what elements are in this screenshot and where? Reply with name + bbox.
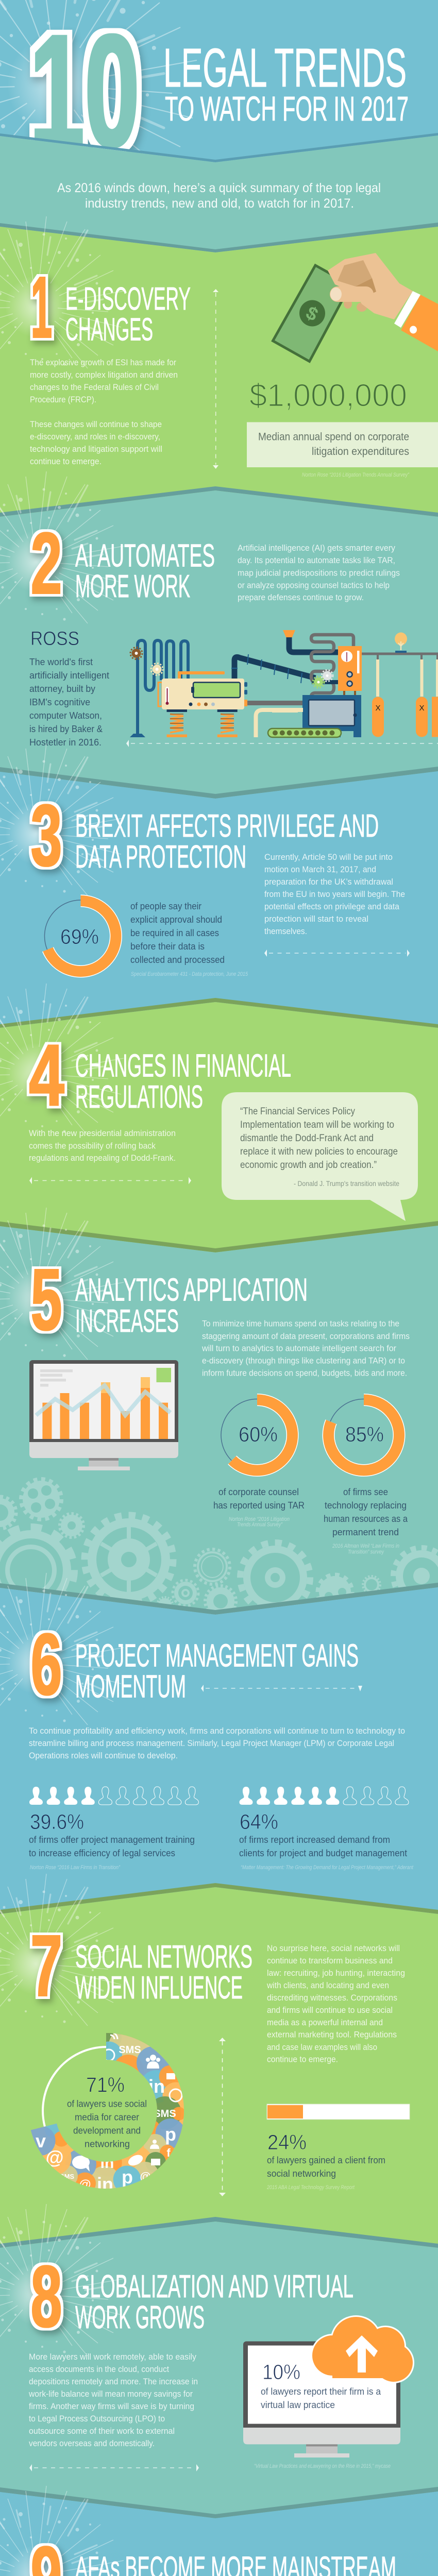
arrow: horizontal dashed (201, 1685, 362, 1692)
heading (75, 1939, 252, 2006)
donut caption (130, 901, 225, 965)
body text: inform future decisions on spend, budgets, bids and more. (202, 1368, 407, 1378)
heading: MOMENTUM (75, 1669, 186, 1705)
icon: hand holding dollar bill (273, 253, 438, 362)
body text: depositions remotely and more. The increase in (29, 2377, 198, 2386)
body text: regulations and repealing of Dodd-Frank. (29, 1153, 176, 1163)
donut caption: of people say their (130, 901, 201, 911)
source: Norton Rose “2016 Litigation Trends Annual Survey” (302, 472, 410, 478)
illustration: AI machine (130, 630, 438, 737)
body text: potential effects on privilege and data (264, 902, 399, 911)
donut caption: before their data is (130, 941, 205, 952)
progress bar: 24% (267, 2104, 410, 2120)
donut chart: social icons 71%: of lawyers use social (67, 2098, 147, 2109)
large number 10: 10 (29, 1, 140, 180)
body text: vendors overseas and domestically. (29, 2438, 155, 2448)
body text: and case law examples will also (267, 2042, 377, 2052)
donut chart: social icons 71%: @ (79, 2178, 91, 2192)
donut chart: social icons 71%: SMS (119, 2044, 141, 2056)
illustration: monitor with stat: of lawyers report their firm is a (261, 2386, 381, 2397)
body text: external marketing tool. Regulations (267, 2030, 397, 2039)
caption: corporate counsel (213, 1486, 305, 1528)
callout box: median annual spend (247, 422, 438, 467)
body text: day. Its potential to automate tasks like TAR, (238, 555, 395, 565)
body text (30, 358, 178, 466)
body text: law: recruiting, job hunting, interacting (267, 1968, 405, 1978)
illustration: monitor with stat: virtual law practice (261, 2399, 335, 2410)
body text: map judicial predispositions to predict rulings (238, 568, 400, 578)
section 3: brexit (0, 743, 438, 1028)
donut chart: social icons 71%: in (97, 2174, 113, 2195)
section: intro (0, 133, 438, 253)
icon: cloud upload (311, 2315, 414, 2383)
heading (75, 808, 379, 875)
donut chart: social icons 71%: f (166, 2146, 171, 2159)
donut chart: 69%: 69% (60, 925, 99, 948)
illustration: monitor with bar chart (29, 1360, 178, 1470)
ROSS description: The world's first (29, 656, 93, 667)
body text: The explosive growth of ESI has made for (30, 358, 176, 367)
stat: 64%: clients for project and budget management (239, 1848, 407, 1858)
body text: e-discovery, and roles in e-discovery, (30, 432, 160, 442)
ROSS description: IBM's cognitive (29, 697, 90, 707)
number 5: 5 (31, 1251, 62, 1349)
section 2: AI automates more work (0, 471, 438, 799)
heading: INCREASES (75, 1303, 179, 1339)
heading: CHANGES (65, 312, 153, 347)
section: header title (0, 0, 438, 184)
donut chart: social icons 71%: SMS (60, 2173, 74, 2180)
body text: prepare defenses continue to grow. (238, 592, 364, 602)
intro paragraph: industry trends, new and old, to watch for in 2017. (85, 196, 354, 211)
arrow: horizontal dashed (126, 740, 438, 747)
caption: corporate counsel: of corporate counsel (218, 1486, 299, 1497)
body text (201, 1319, 410, 1378)
illustration: monitor with stat: 10% (262, 2360, 300, 2384)
body text: more costly, complex litigation and driven (30, 370, 178, 380)
section 6: project management (0, 1573, 438, 1914)
donut caption: explicit approval should (130, 914, 222, 925)
caption: corporate counsel: has reported using TAR (213, 1500, 305, 1511)
ROSS description: attorney, built by (29, 683, 96, 694)
body text: and firms will continue to use social (267, 2005, 393, 2015)
donut caption: collected and processed (130, 954, 225, 965)
stat: 39.6% (29, 1810, 195, 1871)
body text: e-discovery (through things like clustering and TAR) or to (202, 1356, 405, 1365)
donut chart: social icons 71%: p (165, 2124, 176, 2145)
donut chart: 60%: 60% (239, 1422, 278, 1446)
body text (29, 1128, 176, 1163)
stat: 24% (266, 2130, 385, 2191)
donut chart: social icons 71%: 71% (86, 2073, 125, 2097)
body text: access documents in the cloud, conduct (29, 2364, 169, 2374)
quote speech bubble: dismantle the Dodd-Frank Act and (240, 1133, 374, 1144)
body text: motion on March 31, 2017, and (264, 865, 376, 874)
donut chart: social icons 71%: media for career (75, 2111, 139, 2123)
donut chart: social icons 71%: v (36, 2130, 46, 2151)
caption: firms (324, 1486, 408, 1555)
stat: 24%: of lawyers gained a client from (267, 2155, 385, 2165)
body text: continue to transform business and (267, 1956, 393, 1965)
icon: hand holding dollar bill: $ (302, 302, 322, 325)
body text: media as a powerful internal and (267, 2018, 383, 2027)
section 4: financial regulations (0, 984, 438, 1253)
heading (75, 1048, 291, 1115)
heading (75, 1638, 359, 1705)
caption: firms: human resources as a (324, 1513, 408, 1524)
body text: from the EU in two years will begin. The (264, 889, 405, 899)
stat: 39.6%: Norton Rose “2016 Law Firms in Transition” (30, 1865, 121, 1871)
number 8: 8 (31, 2248, 62, 2346)
ROSS description: is hired by Baker & (29, 723, 103, 734)
body text: staggering amount of data present, corporations and firms (202, 1331, 410, 1341)
heading: WORK GROWS (75, 2300, 205, 2335)
body text: firms. Another way firms will save is by turning (29, 2401, 194, 2411)
donut chart: 69% (44, 900, 116, 972)
heading: DATA PROTECTION (75, 839, 246, 875)
ROSS description (29, 656, 109, 748)
intro paragraph (57, 181, 381, 211)
body text: Currently, Article 50 will be put into (264, 852, 393, 862)
heading (75, 538, 215, 604)
body text: outsource some of their work to external (29, 2426, 175, 2436)
number 7: 7 (30, 1917, 62, 2015)
body text: Procedure (FRCP). (30, 395, 96, 404)
body text: protection will start to reveal (264, 914, 368, 924)
body text: No surprise here, social networks will (267, 1943, 400, 1953)
body text: discrediting witnesses. Corporations (267, 1993, 397, 2003)
decorative gears (0, 1479, 438, 1617)
heading (65, 281, 191, 347)
body text (266, 1943, 405, 2064)
donut caption: be required in all cases (130, 927, 219, 938)
number 2: 2 (31, 515, 62, 613)
body text: preparation for the UK’s withdrawal (264, 877, 393, 887)
body text: comes the possibility of rolling back (29, 1141, 156, 1151)
heading: AI AUTOMATES (75, 538, 215, 574)
section 1: e-discovery changes (0, 216, 438, 517)
body text: or analyze opposing counsel tactics to help (238, 580, 390, 590)
body text: work-life balance will mean money savings for (28, 2389, 193, 2399)
ROSS description: computer Watson, (29, 710, 102, 721)
stat: 39.6%: to increase efficiency of legal services (29, 1848, 175, 1858)
body text (264, 852, 405, 936)
donut chart: social icons 71%: p (122, 2166, 133, 2188)
section 8: globalization (0, 2204, 438, 2519)
quote speech bubble: - Donald J. Trump's transition website (294, 1179, 399, 1188)
caption: corporate counsel: Trends Annual Survey” (237, 1522, 283, 1528)
donut chart: social icons 71%: networking (85, 2138, 130, 2149)
callout box: median annual spend: litigation expenditures (312, 446, 409, 457)
section 5: analytics application (0, 1208, 438, 1617)
quote speech bubble (222, 1092, 418, 1221)
ROSS heading: ROSS (30, 628, 79, 650)
heading (75, 1273, 308, 1339)
arrow: vertical dashed (213, 289, 218, 469)
section 7: social networks (0, 1874, 438, 2248)
donut chart: social icons 71%: @ (140, 2170, 151, 2183)
body text: continue to emerge. (30, 456, 102, 466)
stat: 39.6%: 39.6% (30, 1810, 84, 1834)
donut chart: social icons 71%: in (100, 2155, 114, 2172)
ROSS description: Hostetler in 2016. (29, 737, 102, 748)
quote speech bubble: replace it with new policies to encourage (240, 1146, 398, 1157)
donut chart: social icons 71%: @ (45, 2147, 64, 2168)
stat: 64% (239, 1810, 414, 1871)
stat: 64%: of firms report increased demand from (239, 1834, 390, 1845)
body text: with clients, and locating and even (266, 1980, 389, 1990)
caption: firms: technology replacing (325, 1500, 407, 1511)
donut chart: social icons 71%: in (148, 2076, 165, 2097)
arrow: horizontal dashed (29, 2464, 199, 2471)
heading (75, 2269, 353, 2335)
body text (238, 543, 400, 602)
donut chart: social icons 71%: development and (73, 2125, 141, 2136)
stat: 64%: 64% (240, 1810, 278, 1834)
number 6: 6 (31, 1616, 62, 1714)
donut chart: 85% (328, 1399, 399, 1470)
source: “Virtual Law Practices and eLawyering on the Rise in 2015,” mycase (254, 2463, 391, 2469)
section 1: e-discovery changes: 1 (31, 259, 52, 357)
pictogram: 6 of 10 people (239, 1787, 409, 1805)
caption: firms: 2016 Altman Weil “Law Firms in (332, 1543, 399, 1549)
heading: MORE WORK (75, 569, 190, 604)
body text: continue to emerge. (267, 2055, 338, 2064)
stat: one million dollars: $1,000,000 (249, 378, 407, 413)
heading: E-DISCOVERY (65, 281, 191, 317)
source: Special Eurobarometer 431 - Data protection, June 2015 (131, 971, 248, 977)
heading: REGULATIONS (75, 1079, 203, 1115)
body text: These changes will continue to shape (30, 419, 162, 429)
body text: changes to the Federal Rules of Civil (30, 382, 159, 392)
section 9: AFAs (0, 2486, 438, 2576)
donut chart: 60% (221, 1399, 293, 1470)
body text (29, 1726, 405, 1760)
body text: To continue profitability and efficiency work, firms and corporations will continue to turn to technology to (29, 1726, 405, 1736)
stat: 39.6%: of firms offer project management training (29, 1834, 195, 1845)
number 4: 4 (29, 1026, 64, 1124)
body text: With the new presidential administration (29, 1128, 176, 1138)
stat: 24%: 2015 ABA Legal Technology Survey Report (266, 2184, 355, 2191)
body text: Artificial intelligence (AI) gets smarter every (238, 543, 395, 553)
body text (28, 2352, 198, 2448)
arrow: horizontal dashed (29, 1177, 191, 1184)
body text: To minimize time humans spend on tasks relating to the (202, 1319, 399, 1329)
donut chart: 85%: 85% (345, 1422, 384, 1446)
intro paragraph: As 2016 winds down, here’s a quick summary of the top legal (57, 181, 381, 195)
caption: firms: Transition” survey (348, 1549, 384, 1555)
illustration: AI machine: X (375, 704, 381, 713)
heading: WIDEN INFLUENCE (75, 1970, 243, 2006)
body text: More lawyers will work remotely, able to easily (29, 2352, 196, 2362)
body text: will turn to analytics to automate intelligent search for (201, 1344, 396, 1353)
donut chart: social icons 71%: SMS (154, 2108, 176, 2120)
caption: firms: permanent trend (332, 1527, 399, 1537)
ROSS description: artificially intelligent (29, 670, 109, 681)
callout box: median annual spend: Median annual spend on corporate (258, 431, 409, 443)
arrow: horizontal dashed (264, 950, 410, 957)
stat: 24%: 24% (267, 2130, 307, 2154)
quote speech bubble: “The Financial Services Policy (240, 1106, 355, 1117)
illustration: AI machine: X (419, 704, 425, 713)
heading: SOCIAL NETWORKS (75, 1939, 252, 1975)
illustration: monitor with stat (243, 2341, 400, 2458)
quote speech bubble: Implementation team will be working to (240, 1120, 394, 1130)
body text: to Legal Process Outsourcing (LPO) to (29, 2414, 165, 2424)
donut chart: social icons 71% (31, 2033, 184, 2189)
stat: 24%: social networking (267, 2168, 336, 2179)
number 3: 3 (31, 787, 62, 885)
pictogram: 4 of 10 people (29, 1787, 198, 1805)
quote speech bubble: economic growth and job creation.” (240, 1160, 377, 1171)
arrow: vertical dashed (219, 2038, 226, 2196)
body text: technology and litigation support will (30, 444, 162, 454)
body text: streamline billing and process management. Similarly, Legal Project Manager (LPM) or Corporate Legal (29, 1738, 394, 1748)
caption: firms: of firms see (343, 1486, 388, 1497)
body text: themselves. (264, 926, 307, 936)
body text: Operations roles will continue to develop. (29, 1751, 178, 1760)
caption: corporate counsel: Norton Rose “2016 Litigation (229, 1516, 290, 1522)
